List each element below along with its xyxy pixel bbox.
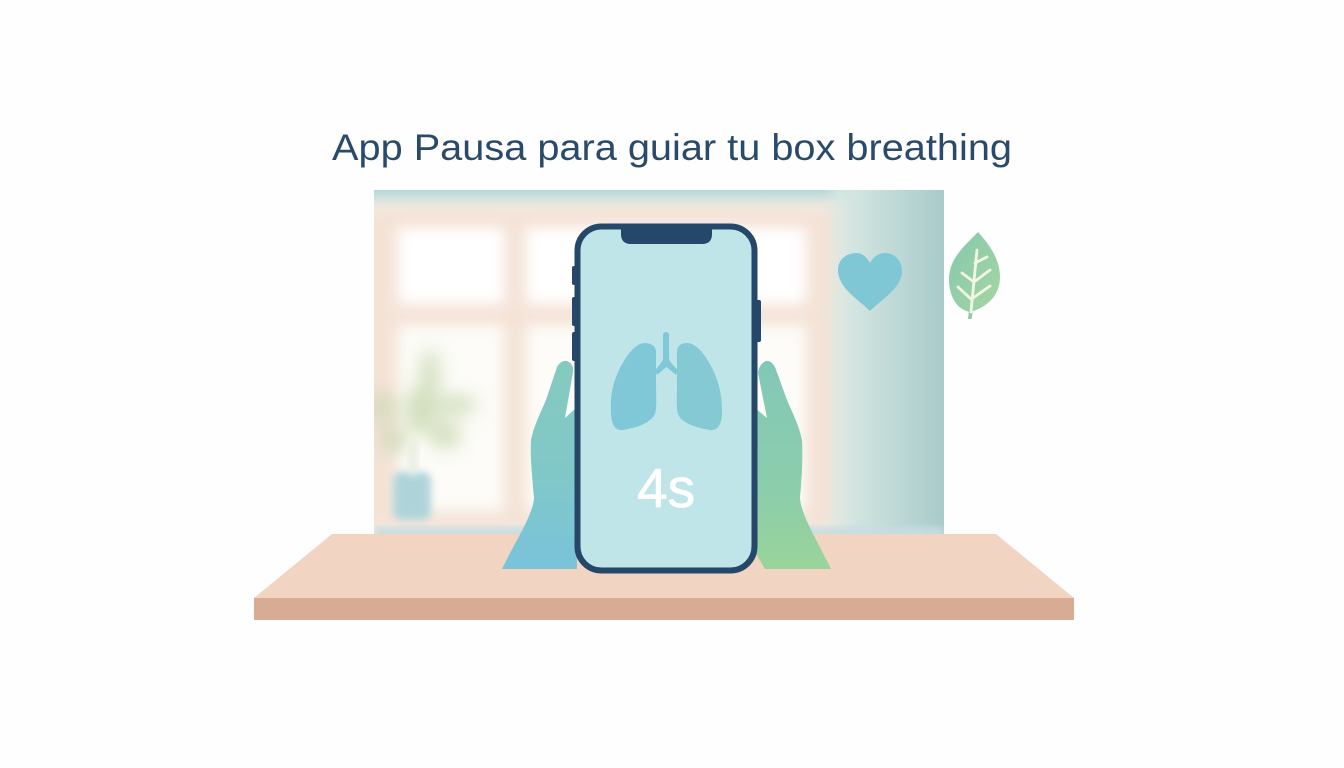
- icon: right hand: [755, 361, 831, 569]
- phone body: [578, 226, 754, 570]
- infographic scene: [254, 133, 1074, 620]
- bottom blue band: [374, 524, 944, 534]
- icon: phone: [572, 226, 761, 570]
- icon: heart: [838, 253, 902, 311]
- potted plant: [370, 349, 477, 520]
- icon: leaf: [949, 232, 1000, 319]
- countdown label: 4s: [637, 457, 695, 519]
- table: [254, 534, 1074, 620]
- side buttons: [572, 266, 761, 361]
- icon: lungs: [611, 332, 722, 430]
- panel: blurred window background: [360, 190, 944, 539]
- title: App Pausa para guiar tu box breathing: [332, 127, 1012, 168]
- notch: [621, 227, 712, 244]
- window frame: [360, 208, 838, 526]
- icon: left hand: [502, 361, 577, 569]
